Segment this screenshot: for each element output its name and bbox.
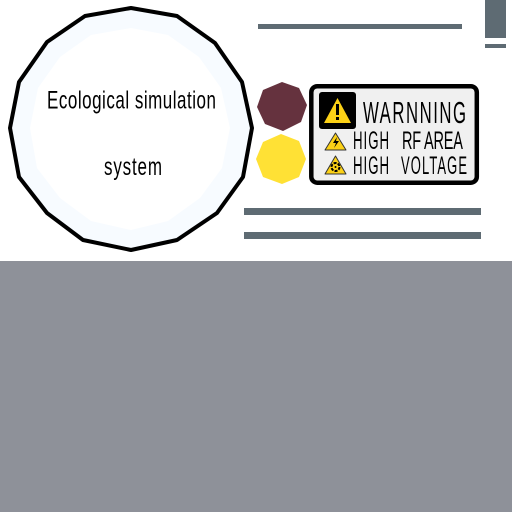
rf area label: RF AREA [402,128,463,155]
title polygon outline [10,8,252,250]
high voltage label [353,153,467,180]
high voltage label: HIGH [353,153,389,180]
high voltage label: VOLTAGE [401,153,467,180]
rf area label: HIGH [353,128,389,155]
yellow octagon [256,134,306,184]
panel: title circle [10,8,252,250]
bottom grey panel [0,261,512,512]
top right small bar [485,44,506,48]
warning sign [311,86,477,183]
title polygon inner fill [30,28,230,230]
top right block [485,0,506,38]
middle bar 1 [244,208,481,215]
middle bar 2 [244,232,481,239]
title text line 1: Ecological simulation [47,86,216,114]
icon: high voltage [325,133,346,150]
maroon octagon [257,82,307,131]
top bar [258,24,462,29]
icon: warning triangle [319,92,356,129]
sign plate [311,86,477,183]
title text line 2: system [104,153,162,181]
rf area label [353,128,463,155]
icon: biohazard [325,156,346,174]
warning heading: WARNNING [363,96,466,130]
